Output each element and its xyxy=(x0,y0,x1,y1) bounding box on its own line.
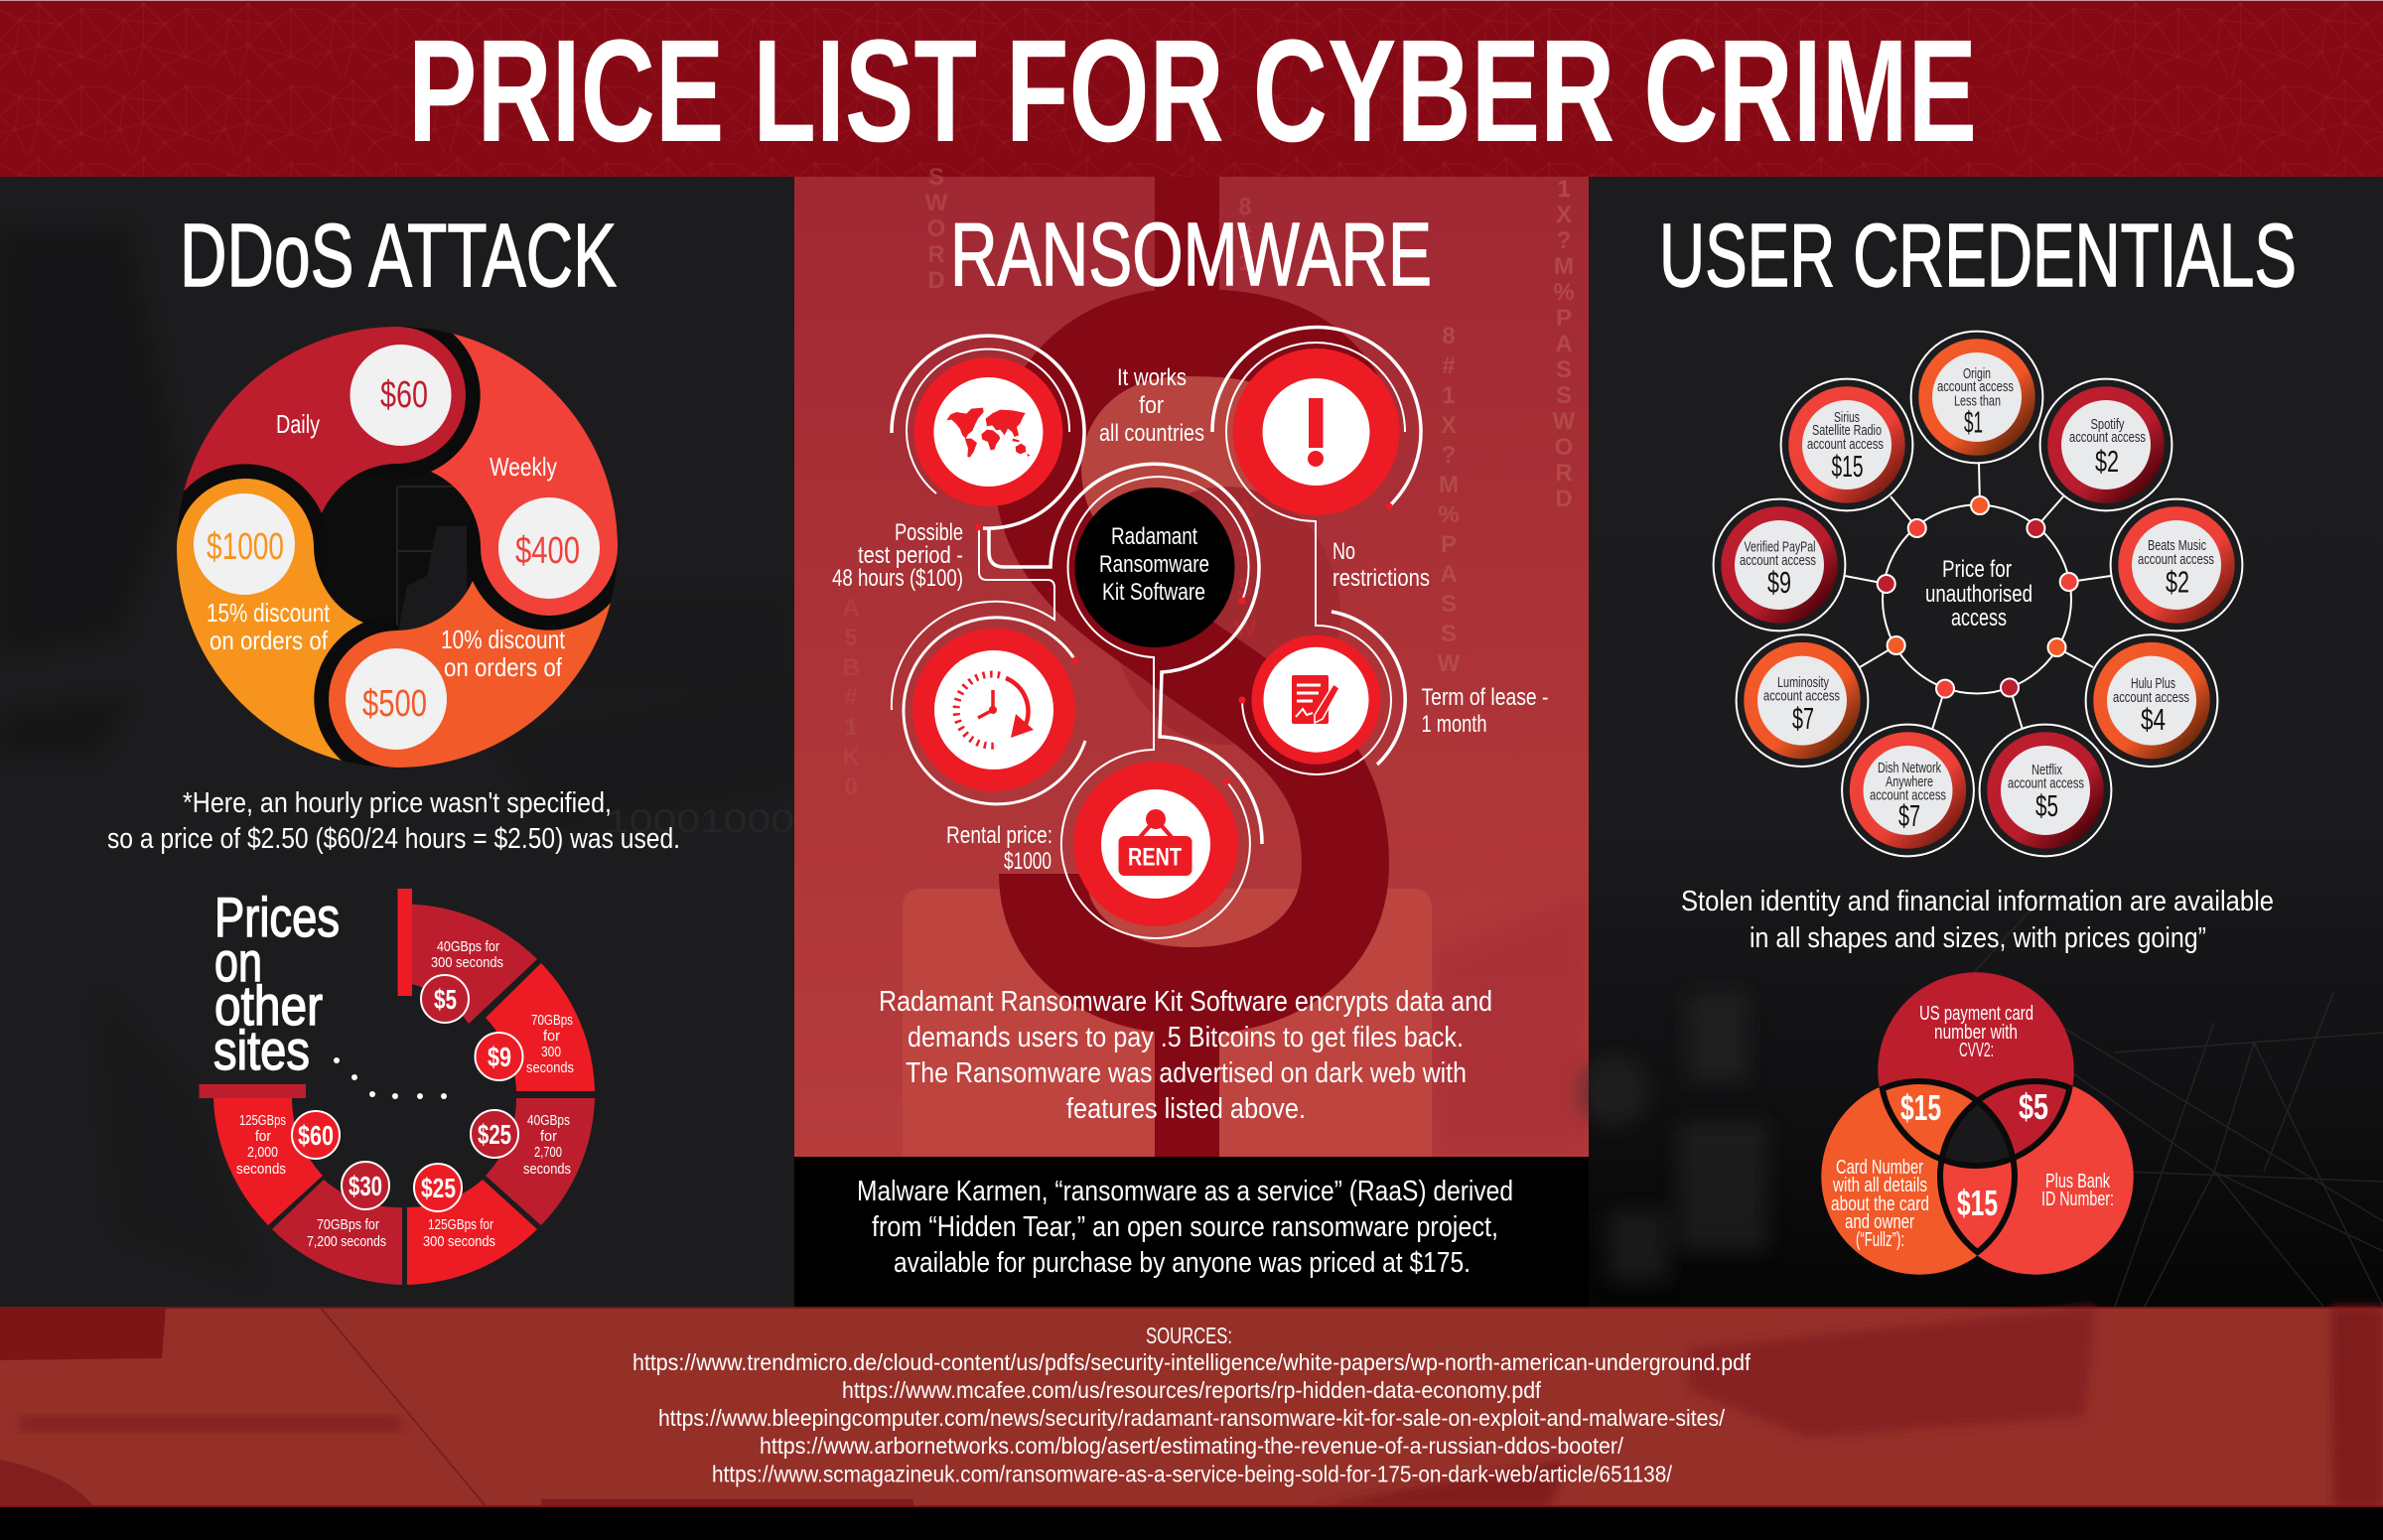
footnote: *Here, an hourly price wasn't specified, xyxy=(183,787,612,819)
connector dots xyxy=(975,502,1392,784)
radial chart: prices on other sites: seconds xyxy=(523,1161,571,1178)
credential: Netflix: $5 xyxy=(2035,788,2058,823)
bottom black band xyxy=(0,1507,2383,1540)
credentials caption xyxy=(1681,886,2274,954)
ransomware description: features listed above. xyxy=(1066,1093,1306,1125)
matrix characters: 8#1 xyxy=(1238,194,1252,276)
feature labels: $1000 xyxy=(1004,848,1051,875)
credential: Beats Music xyxy=(2111,499,2242,630)
sources text xyxy=(632,1323,1752,1487)
credential: Spotify: Spotify xyxy=(2091,417,2125,433)
heading: prices on other sites: sites xyxy=(213,1019,310,1081)
footnote xyxy=(107,787,680,855)
sources text: SOURCES: xyxy=(1146,1323,1232,1348)
radial chart: prices on other sites: 2,700 xyxy=(534,1144,562,1161)
matrix characters: 1X?M%PASSWORD xyxy=(1553,176,1576,512)
radial chart: prices on other sites: for xyxy=(540,1128,557,1145)
panel: Malware Karmen note: Malware Karmen, “ransomware as a service” (RaaS) derived xyxy=(857,1176,1513,1207)
credential: Verified PayPal: Verified PayPal xyxy=(1744,540,1815,556)
pinwheel price chart: $60 xyxy=(380,374,428,416)
pinwheel price chart: on orders of xyxy=(210,626,329,655)
matrix characters: A5B#1K0 xyxy=(842,595,860,800)
credential: Verified PayPal xyxy=(1714,499,1845,630)
credential: Sirius Satellite Radio: Satellite Radio xyxy=(1812,423,1882,439)
radial chart: prices on other sites: $9 xyxy=(488,1042,511,1072)
icon: world map xyxy=(913,357,1062,506)
venn diagram: about the card xyxy=(1831,1193,1929,1215)
credential: Origin: account access xyxy=(1937,379,2014,395)
pinwheel price chart: Daily xyxy=(276,409,320,439)
feature labels: Rental price: xyxy=(946,822,1052,849)
credential: Dish Network Anywhere: Dish Network xyxy=(1878,761,1942,776)
credential: Luminosity: $7 xyxy=(1792,701,1814,736)
panel: DDoS attack: 10001000 xyxy=(606,803,794,839)
radial chart: prices on other sites: seconds xyxy=(526,1059,574,1076)
credential: Origin: Origin xyxy=(1963,366,1991,382)
sources text: https://www.scmagazineuk.com/ransomware-as-a-service-being-sold-for-175-on-dark-web/article/651138/ xyxy=(712,1462,1673,1487)
pinwheel price chart xyxy=(177,327,618,768)
heading: prices on other sites xyxy=(213,886,340,1081)
credential: Hulu Plus xyxy=(2086,634,2217,767)
header banner xyxy=(0,0,2383,177)
credential: Hulu Plus: account access xyxy=(2113,690,2189,706)
heading: ransomware: RANSOMWARE xyxy=(950,206,1432,305)
venn diagram: with all details xyxy=(1832,1175,1927,1196)
credential: Hulu Plus: $4 xyxy=(2141,702,2166,737)
matrix characters: 8#1X?M%PASSW xyxy=(1438,323,1461,677)
heading: prices on other sites: Prices xyxy=(214,886,340,948)
radial chart: prices on other sites: 40GBps xyxy=(527,1112,570,1129)
credential: Luminosity: account access xyxy=(1763,689,1840,705)
radial chart: prices on other sites: 125GBps for xyxy=(428,1216,493,1233)
venn diagram: ID Number: xyxy=(2041,1189,2114,1210)
radial chart: prices on other sites: $60 xyxy=(298,1120,334,1151)
feature labels: Term of lease - xyxy=(1422,684,1549,711)
connector rings xyxy=(892,328,1421,938)
credential: Dish Network Anywhere: Anywhere xyxy=(1886,774,1933,790)
credential: Spotify: account access xyxy=(2069,430,2146,446)
matrix characters xyxy=(842,164,1576,800)
credential: Beats Music: Beats Music xyxy=(2148,538,2206,554)
radial chart: prices on other sites: 2,000 xyxy=(247,1144,278,1161)
credential: Beats Music: account access xyxy=(2138,552,2214,568)
sources text: https://www.mcafee.com/us/resources/reports/rp-hidden-data-economy.pdf xyxy=(842,1377,1542,1403)
center hub: Radamant Ransomware Kit Software: Radamant xyxy=(1111,523,1197,550)
credential: Verified PayPal: account access xyxy=(1740,553,1816,569)
pinwheel price chart: $1000 xyxy=(207,526,284,568)
feature labels: test period - xyxy=(858,542,963,569)
credential: Sirius Satellite Radio: $15 xyxy=(1831,449,1863,484)
radial chart: prices on other sites: 300 seconds xyxy=(431,954,503,971)
icon: clock xyxy=(912,629,1075,791)
radial chart: prices on other sites: 300 xyxy=(541,1044,561,1060)
radial chart: prices on other sites: 70GBps xyxy=(531,1012,573,1029)
icon: alert xyxy=(1233,349,1400,515)
pinwheel price chart: Weekly xyxy=(490,452,557,482)
radial chart: prices on other sites: 70GBps for xyxy=(317,1216,379,1233)
panel: Malware Karmen note: from “Hidden Tear,” an open source ransomware project, xyxy=(872,1211,1498,1243)
radial chart: prices on other sites: for xyxy=(543,1028,560,1045)
panel: Malware Karmen note: available for purchase by anyone was priced at $175. xyxy=(894,1247,1471,1279)
panel: ransomware xyxy=(794,164,1589,1157)
radial chart: prices on other sites: seconds xyxy=(236,1161,286,1178)
credential: Beats Music: $2 xyxy=(2166,564,2189,600)
panel: Malware Karmen note xyxy=(794,1157,1589,1307)
sources footer xyxy=(0,1307,2383,1507)
feature labels: 1 month xyxy=(1422,711,1487,738)
icon: rent sign: RENT xyxy=(1128,844,1182,872)
venn diagram: number with xyxy=(1934,1022,2018,1044)
feature labels: restrictions xyxy=(1332,565,1430,592)
credential: Sirius Satellite Radio: account access xyxy=(1807,437,1884,453)
feature labels: Possible xyxy=(895,519,963,546)
ransomware description: demands users to pay .5 Bitcoins to get files back. xyxy=(908,1022,1464,1053)
ransomware description xyxy=(879,986,1492,1125)
pinwheel price chart: 15% discount xyxy=(207,598,331,628)
credential: Netflix: Netflix xyxy=(2032,763,2063,778)
hub and spoke diagram: unauthorised xyxy=(1925,581,2033,608)
ransomware description: The Ransomware was advertised on dark web with xyxy=(906,1057,1467,1089)
venn diagram: and owner xyxy=(1845,1211,1914,1233)
heading: prices on other sites: other xyxy=(214,974,323,1037)
center hub: Radamant Ransomware Kit Software xyxy=(1074,488,1235,647)
matrix characters: ASSW xyxy=(1234,495,1257,641)
radial chart: prices on other sites: 125GBps xyxy=(239,1112,286,1129)
radial chart: prices on other sites: $25 xyxy=(421,1173,456,1203)
venn diagram: $15 xyxy=(1900,1087,1941,1128)
venn diagram: Card Number xyxy=(1836,1157,1923,1179)
radial chart: prices on other sites: 300 seconds xyxy=(423,1233,495,1250)
radial chart: prices on other sites: $5 xyxy=(434,984,457,1015)
venn diagram: $5 xyxy=(2019,1086,2048,1127)
ransomware description: Radamant Ransomware Kit Software encrypts data and xyxy=(879,986,1492,1018)
credential: Origin xyxy=(1911,332,2042,463)
credential: Netflix: account access xyxy=(2008,776,2084,792)
venn diagram: (“Fullz”): xyxy=(1856,1229,1904,1251)
credential: Spotify xyxy=(2040,379,2172,510)
footnote: so a price of $2.50 ($60/24 hours = $2.50) was used. xyxy=(107,823,680,855)
credential: Dish Network Anywhere: $7 xyxy=(1898,798,1920,833)
credentials caption: in all shapes and sizes, with prices going” xyxy=(1750,922,2206,954)
radial chart: prices on other sites: 7,200 seconds xyxy=(307,1233,386,1250)
credential: Origin: $1 xyxy=(1964,405,1983,439)
hub and spoke diagram xyxy=(1845,463,2111,733)
sources text: https://www.trendmicro.de/cloud-content/us/pdfs/security-intelligence/white-papers/wp-north-american-underground.pdf xyxy=(632,1349,1752,1375)
credential: Sirius Satellite Radio xyxy=(1781,379,1912,510)
feature labels: No xyxy=(1332,538,1355,565)
panel: user credentials xyxy=(1579,177,2383,1307)
pinwheel price chart: $400 xyxy=(515,530,580,572)
credential: Dish Network Anywhere: account access xyxy=(1870,788,1946,804)
credential: Origin: Less than xyxy=(1954,393,2001,409)
dollar sign background xyxy=(1038,177,1345,1157)
venn diagram: Plus Bank xyxy=(2045,1171,2111,1192)
pinwheel price chart: on orders of xyxy=(444,652,563,682)
icon: rent sign xyxy=(1073,762,1238,926)
pinwheel price chart: 10% discount xyxy=(441,625,566,654)
hub and spoke diagram: Price for xyxy=(1942,556,2012,583)
icon: lease document xyxy=(1251,635,1380,765)
panel: DDoS attack xyxy=(0,177,794,1307)
heading: DDoS attack: DDoS ATTACK xyxy=(180,207,617,306)
feature labels: for xyxy=(1139,392,1164,419)
feature labels: all countries xyxy=(1099,420,1204,447)
credential: Hulu Plus: Hulu Plus xyxy=(2131,676,2175,692)
radial chart: prices on other sites xyxy=(199,889,595,1285)
credentials caption: Stolen identity and financial information are available xyxy=(1681,886,2274,917)
credential: Netflix xyxy=(1980,725,2111,856)
feature labels: It works xyxy=(1117,364,1187,391)
feature labels: 48 hours ($100) xyxy=(832,565,963,592)
sources text: https://www.arbornetworks.com/blog/asert/estimating-the-revenue-of-a-russian-ddos-booter/ xyxy=(760,1433,1624,1459)
center hub: Radamant Ransomware Kit Software: Kit Software xyxy=(1102,579,1205,606)
credential: Luminosity: Luminosity xyxy=(1777,675,1830,691)
feature labels xyxy=(832,364,1549,875)
radial chart: prices on other sites: $25 xyxy=(478,1119,511,1150)
credential: Dish Network Anywhere xyxy=(1842,725,1974,856)
venn diagram: CVV2: xyxy=(1959,1040,1994,1061)
venn diagram: US payment card xyxy=(1919,1003,2033,1025)
radial chart: prices on other sites: 40GBps for xyxy=(437,938,499,955)
sources text: https://www.bleepingcomputer.com/news/security/radamant-ransomware-kit-for-sale-on-exploit-and-malware-sites/ xyxy=(658,1405,1726,1431)
venn diagram xyxy=(1821,972,2134,1275)
radial chart: prices on other sites: $30 xyxy=(349,1171,382,1201)
radial chart: prices on other sites: for xyxy=(255,1128,271,1145)
credential: Luminosity xyxy=(1737,634,1868,767)
venn diagram: $15 xyxy=(1957,1183,1998,1223)
matrix characters: SWORD xyxy=(925,164,948,294)
heading: prices on other sites: on xyxy=(214,930,262,993)
credential: Verified PayPal: $9 xyxy=(1767,565,1791,600)
pinwheel price chart: $500 xyxy=(362,683,427,725)
credential: Spotify: $2 xyxy=(2095,444,2119,479)
hub and spoke diagram: access xyxy=(1951,605,2007,631)
credential: Sirius Satellite Radio: Sirius xyxy=(1834,410,1860,426)
center hub: Radamant Ransomware Kit Software: Ransomware xyxy=(1099,551,1209,578)
